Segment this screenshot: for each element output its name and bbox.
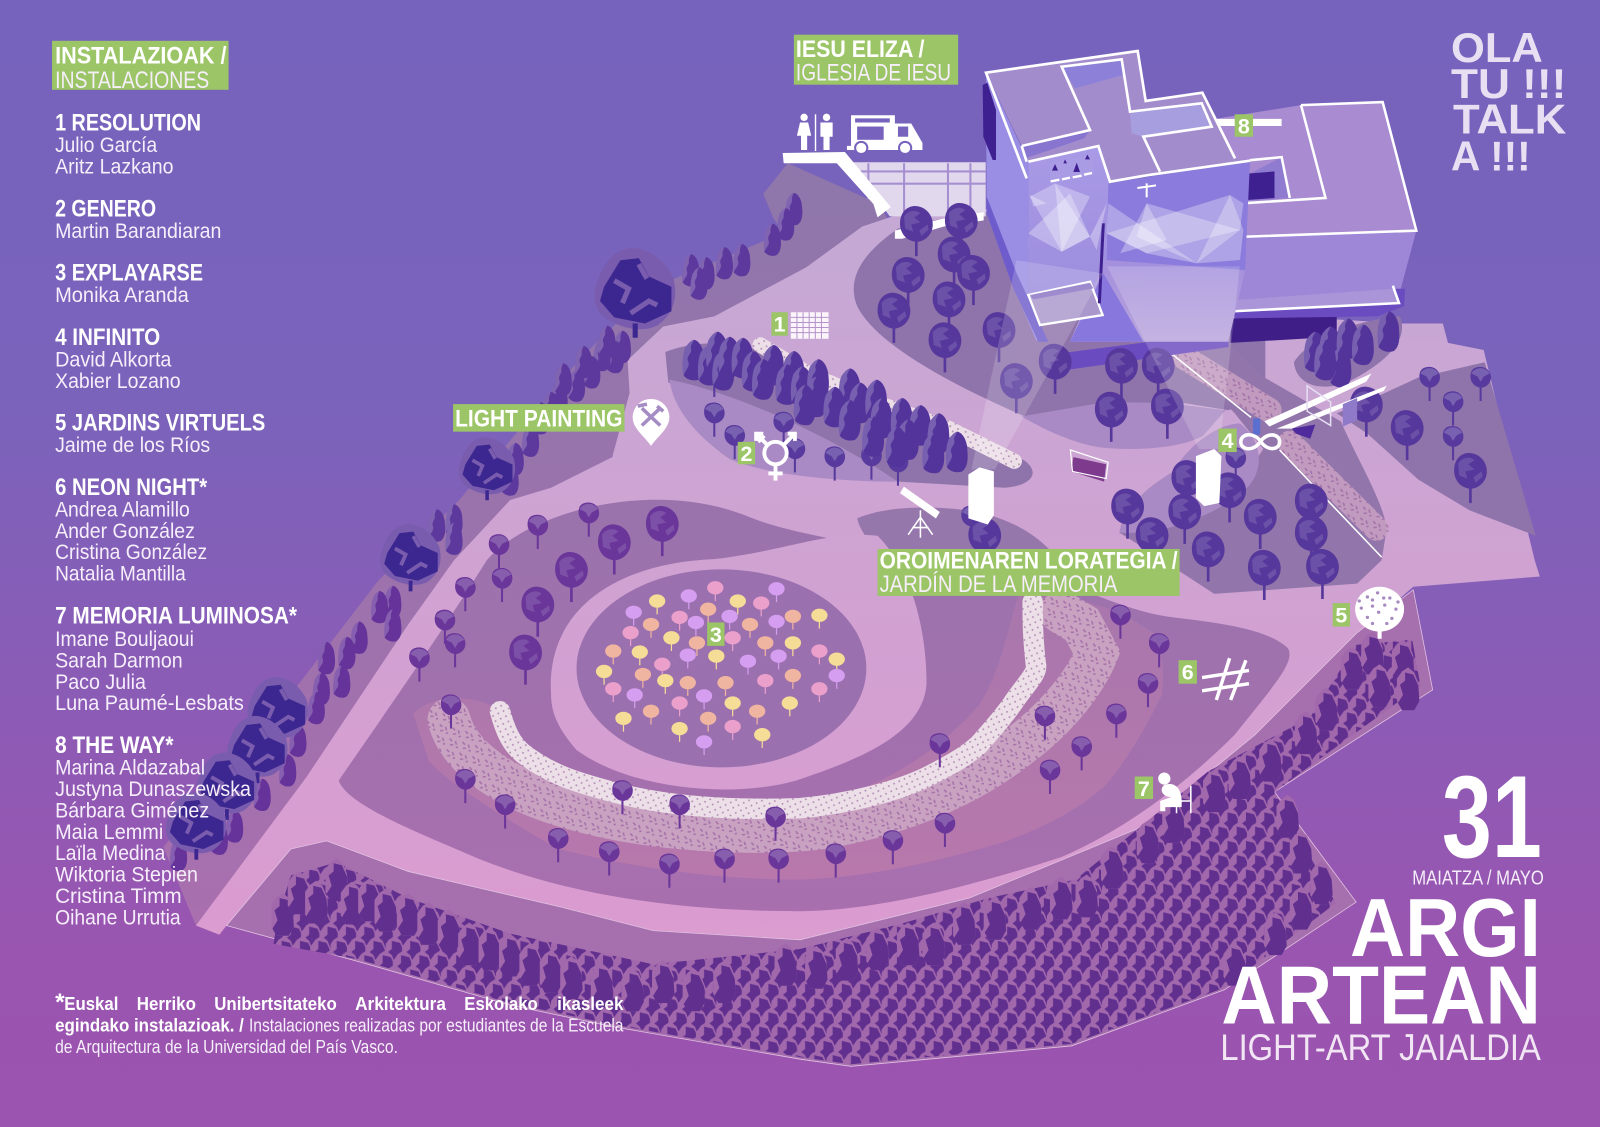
kaleidoscope left [1028, 183, 1107, 252]
base band [1040, 332, 1229, 369]
footnote: Eskolako [464, 993, 538, 1014]
footnote: Euskal [64, 993, 118, 1014]
shadow wedge [1070, 273, 1143, 342]
icon: tent [1070, 450, 1108, 482]
heading: installations: INSTALACIONES [55, 67, 209, 94]
front facade lower [1070, 260, 1245, 342]
number tags: 3 [710, 623, 722, 647]
logo: olatu talka: OLA [1451, 24, 1543, 71]
right wing wall [1234, 231, 1416, 311]
front facade top [1107, 161, 1250, 270]
lavender lawn [669, 380, 898, 482]
cross [1137, 183, 1156, 197]
bells [1052, 155, 1090, 172]
footnote: Herriko [137, 993, 196, 1014]
list: installations and artists: Natalia Mantilla [55, 562, 186, 586]
event title: ARTEAN [1221, 948, 1541, 1041]
church building [983, 51, 1416, 369]
dark opening [1247, 171, 1274, 200]
icon: sculpture 4 [1253, 373, 1387, 439]
right wing roof [1212, 102, 1416, 237]
roof recess left [1022, 131, 1090, 158]
label: iesu eliza: IGLESIA DE IESU [796, 60, 951, 87]
lavender blob [1119, 423, 1259, 533]
footnote [55, 989, 624, 1057]
list: installations and artists: Marina Aldazabal [55, 755, 205, 779]
footnote: Arkitektura [355, 993, 447, 1014]
small trees upper [704, 363, 1491, 540]
list: installations and artists: Paco Julia [55, 670, 146, 694]
list: installations and artists: Laïla Medina [55, 841, 165, 865]
logo: olatu talka: TALK [1453, 96, 1566, 143]
diagonal white lines [1164, 348, 1382, 557]
footnote: de Arquitectura de la Universidad del País Vasco. [55, 1036, 398, 1057]
round trees left lobe [509, 506, 679, 685]
label: memory garden: JARDÍN DE LA MEMORIA [880, 571, 1118, 598]
strip hedge trees lower [170, 586, 401, 871]
list: installations and artists: Maia Lemmi [55, 820, 163, 844]
label: iesu eliza [794, 35, 958, 87]
big dark trees [166, 248, 675, 860]
small trees [409, 503, 1170, 888]
lavender lawn centre [1021, 402, 1226, 449]
kaleidoscope right [1107, 195, 1243, 263]
list: installations and artists: Xabier Lozano [55, 369, 181, 393]
logo: olatu talka: TU !!! [1451, 60, 1566, 107]
list: installations and artists: Ander González [55, 519, 195, 543]
ground paths [196, 209, 1540, 944]
flower band [413, 592, 1163, 880]
bell slats [1051, 173, 1092, 181]
icon: hash 6 [1202, 658, 1249, 700]
footnote: * [55, 989, 65, 1016]
roof recess right [1130, 105, 1210, 137]
list: installations and artists: Martin Barandiaran [55, 219, 221, 243]
number tags: 1 [774, 313, 786, 337]
list: installations and artists: Sarah Darmon [55, 648, 183, 672]
number tags: 2 [740, 442, 752, 466]
right wing lines [1234, 102, 1416, 311]
list: installations and artists: 8 THE WAY* [55, 732, 174, 759]
list: installations and artists: 1 RESOLUTION [55, 110, 201, 137]
list: installations and artists: Justyna Dunaszewska [55, 777, 251, 801]
icon: infinity 4 [1241, 435, 1280, 449]
map: site ground [163, 163, 1540, 1066]
left facade [1028, 146, 1110, 325]
list: installations and artists: Julio García [55, 133, 157, 157]
roof [986, 51, 1250, 182]
footnote: Unibertsitateko [214, 993, 337, 1014]
number tags: 7 [1138, 777, 1150, 801]
dark wedge [983, 83, 996, 160]
round trees right [878, 203, 1487, 600]
diagonal mottled hedge [1176, 352, 1377, 529]
lollipop flowers [596, 581, 845, 755]
hedge trees top patch [683, 311, 1399, 473]
number tags [707, 114, 1350, 801]
icon: grid 1 [791, 312, 829, 339]
heading: installations [52, 41, 229, 94]
footnote: ikasleek [557, 993, 624, 1014]
right grove patch [1337, 362, 1536, 536]
label: iesu eliza: IESU ELIZA / [796, 36, 925, 63]
number tags: 5 [1335, 603, 1347, 627]
inner flower circle lawn [577, 569, 866, 767]
dark base [1231, 314, 1337, 343]
list: installations and artists: 4 INFINITO [55, 324, 160, 351]
telescope lobe [857, 507, 1051, 587]
balcony [1028, 282, 1103, 325]
event title [1220, 751, 1544, 1068]
label: light painting: LIGHT PAINTING [455, 406, 622, 433]
list: installations and artists: Monika Aranda [55, 283, 189, 307]
outer left wall [986, 73, 1038, 342]
ring path around flowers [551, 535, 927, 789]
skylight [1062, 59, 1123, 88]
facade slit [1099, 223, 1103, 303]
list: installations and artists: 7 MEMORIA LUMINOSA* [55, 602, 297, 629]
event title: ARGI [1350, 881, 1541, 974]
icon: gender 2 [756, 434, 795, 481]
list: installations and artists: Cristina Timm [55, 884, 182, 908]
list: installations and artists: Wiktoria Stepien [55, 863, 198, 887]
list: installations and artists: 6 NEON NIGHT* [55, 474, 208, 501]
list: installations and artists: 5 JARDINS VIRTUELS [55, 410, 265, 437]
event title: LIGHT-ART JAIALDIA [1220, 1027, 1541, 1068]
list: installations and artists: 3 EXPLAYARSE [55, 260, 203, 287]
grove patch by church [854, 209, 1265, 416]
white flower hedge [500, 602, 1036, 809]
bell panel [1050, 155, 1093, 183]
list: installations and artists: Andrea Alamillo [55, 497, 190, 521]
top white flower hedge [760, 345, 1014, 461]
paving and platform [783, 152, 986, 239]
top hedge patch [665, 343, 1033, 488]
list: installations and artists: Oihane Urrutia [55, 905, 181, 929]
logo: olatu talka: A !!! [1451, 132, 1531, 179]
list: installations and artists [55, 110, 297, 929]
list: installations and artists: Imane Bouljaoui [55, 627, 194, 651]
main block [983, 51, 1250, 342]
icon: light painting pin [633, 399, 669, 446]
ledge [1234, 289, 1399, 311]
list: installations and artists: Luna Paumé-Lesbats [55, 691, 244, 715]
number tags: 8 [1238, 115, 1250, 139]
event title: 31 [1442, 751, 1542, 882]
number tags: 6 [1182, 661, 1194, 685]
heading: installations: INSTALAZIOAK / [55, 42, 227, 69]
forest ground [227, 590, 1433, 1066]
projected light cones [971, 260, 1240, 469]
diagonal grove patch [1119, 343, 1387, 594]
mottled hedge [449, 612, 1097, 831]
icon: food truck [847, 115, 922, 154]
icon: white screens [968, 449, 1221, 524]
top right patch [1294, 316, 1402, 387]
event title: MAIATZA / MAYO [1412, 868, 1544, 890]
number tags: 4 [1222, 429, 1234, 453]
logo: olatu talka [1451, 24, 1566, 179]
icon: telescope [901, 488, 939, 538]
icon: seated figure 7 [1158, 772, 1191, 813]
hedge strip [163, 163, 888, 926]
central garden lobe [339, 500, 1290, 911]
icon: white tree 5 [1355, 587, 1404, 639]
list: installations and artists: 2 GENERO [55, 195, 156, 222]
footnote: Instalaciones realizadas por estudiantes de la Escuela [249, 1015, 624, 1036]
forest mass [271, 632, 1420, 1064]
roof white lines [986, 51, 1250, 182]
icon: toilets [797, 114, 833, 151]
list: installations and artists: Jaime de los Ríos [55, 433, 210, 457]
list: installations and artists: Bárbara Giménez [55, 798, 209, 822]
footnote: egindako instalazioak. / [55, 1015, 244, 1036]
list: installations and artists: Cristina González [55, 540, 207, 564]
list: installations and artists: Aritz Lazkano [55, 154, 173, 178]
strip hedge trees upper [428, 193, 802, 555]
label: memory garden: OROIMENAREN LORATEGIA / [880, 547, 1178, 574]
label: memory garden [878, 547, 1180, 598]
list: installations and artists: David Alkorta [55, 347, 172, 371]
